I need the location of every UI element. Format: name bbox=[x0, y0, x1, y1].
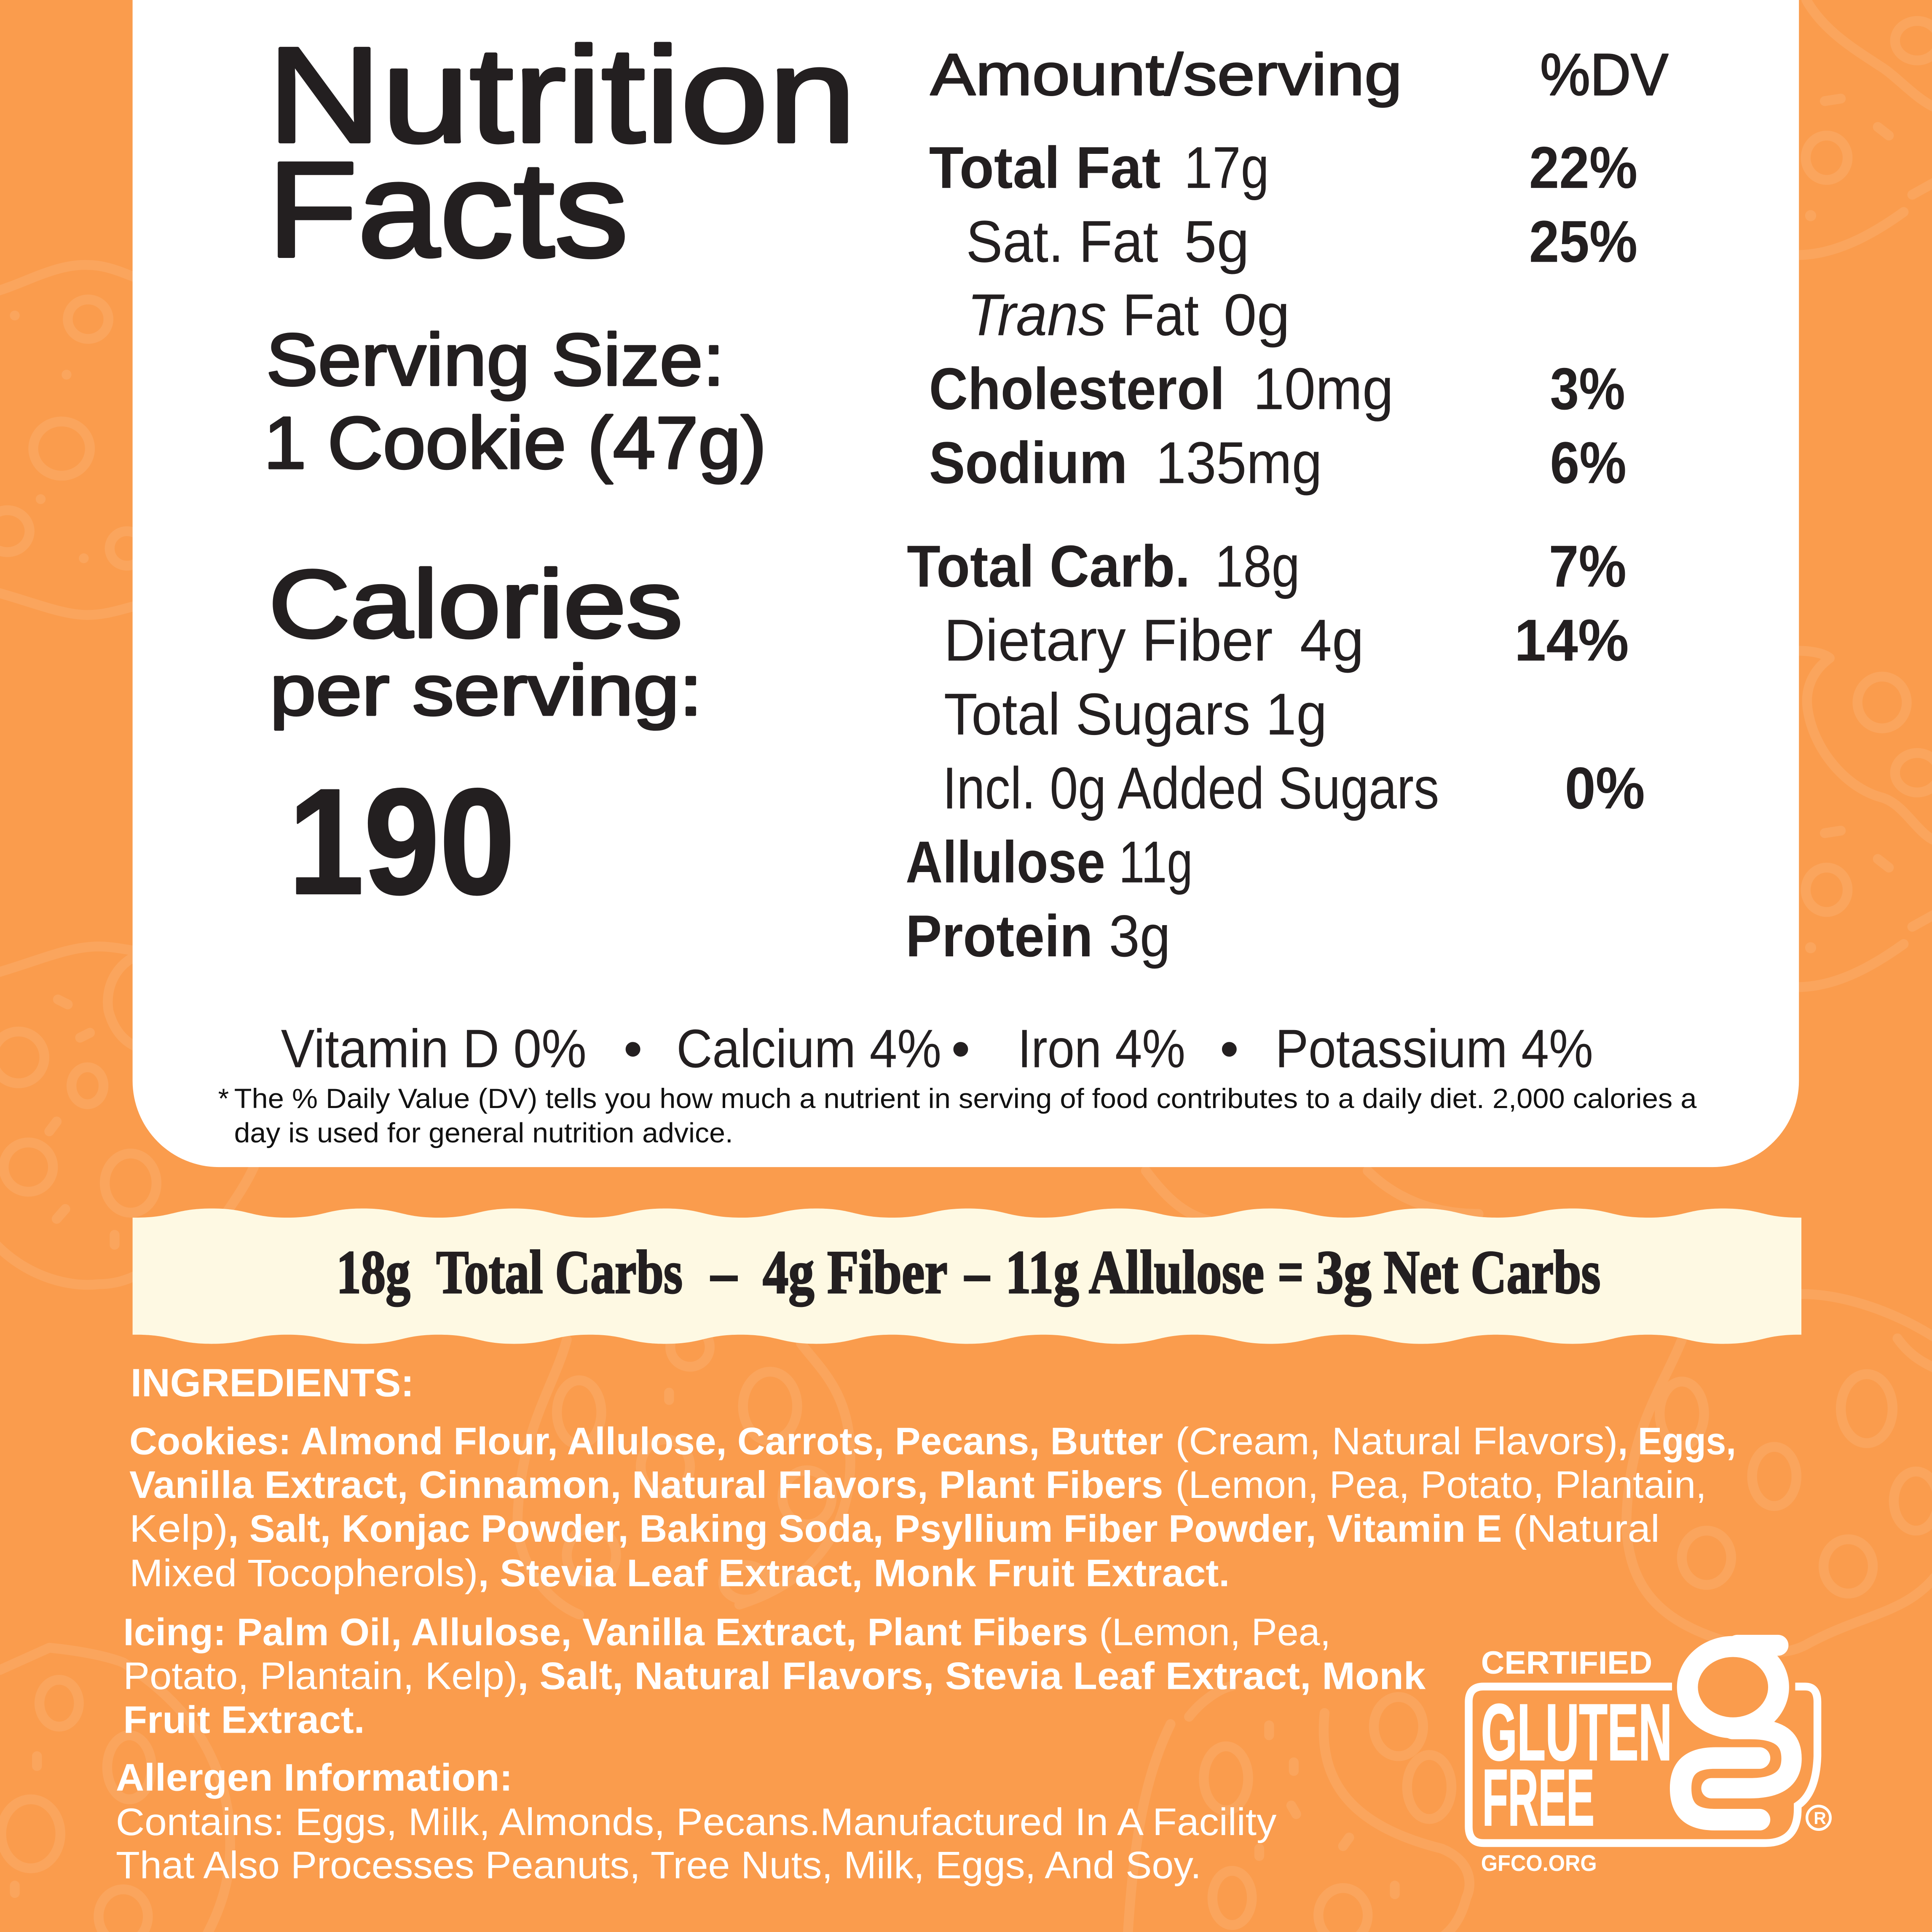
vitamins and minerals row: • bbox=[1220, 1019, 1239, 1079]
cookie ingredients: , Stevia Leaf Extract, Monk Fruit Extract. bbox=[478, 1552, 1230, 1594]
nutrient table: carbs, allulose, protein: 18g bbox=[1215, 533, 1300, 599]
icon: certified gluten free logo: FREE bbox=[1482, 1753, 1594, 1843]
net carbs banner: 18g bbox=[336, 1238, 410, 1306]
column headers: %DV bbox=[1540, 41, 1668, 107]
cookie ingredients: Kelp) bbox=[129, 1508, 228, 1550]
allergen information: That Also Processes Peanuts, Tree Nuts, Milk, Eggs, And Soy. bbox=[116, 1844, 1201, 1886]
calories per serving: Calories bbox=[268, 551, 683, 658]
nutrient table: fats, cholesterol, sodium bbox=[929, 134, 1637, 496]
icing ingredients: Icing: Palm Oil, Allulose, Vanilla Extract, Plant Fibers bbox=[123, 1611, 1088, 1654]
icon: certified gluten free logo: CERTIFIED bbox=[1481, 1645, 1652, 1681]
nutrient table: fats, cholesterol, sodium: 17g bbox=[1184, 134, 1269, 201]
net carbs banner bbox=[133, 1208, 1801, 1344]
title: Nutrition Facts: Nutrition bbox=[268, 19, 856, 171]
nutrient table: fats, cholesterol, sodium: Total Fat bbox=[929, 134, 1161, 201]
nutrient table: carbs, allulose, protein: Total Carb. bbox=[907, 533, 1190, 599]
cookie ingredients: , Eggs, bbox=[1618, 1420, 1736, 1462]
serving size: 1 Cookie (47g) bbox=[264, 402, 766, 484]
nutrient table: fats, cholesterol, sodium: 5g bbox=[1184, 208, 1249, 274]
vitamins and minerals row: Potassium 4% bbox=[1275, 1019, 1593, 1079]
net carbs banner: – bbox=[965, 1238, 990, 1306]
net carbs banner: 3g bbox=[1316, 1238, 1372, 1306]
nutrient table: carbs, allulose, protein: Allulose bbox=[906, 829, 1105, 895]
net carbs banner: Total Carbs bbox=[436, 1238, 683, 1306]
nutrient table: carbs, allulose, protein: Dietary Fiber bbox=[944, 607, 1273, 673]
vitamins and minerals row bbox=[281, 1019, 1593, 1079]
net carbs banner: 4g Fiber bbox=[763, 1238, 948, 1306]
cookie ingredients: , Salt, Konjac Powder, Baking Soda, Psyllium Fiber Powder, Vitamin E bbox=[228, 1508, 1502, 1550]
icon: certified gluten free logo bbox=[1469, 1645, 1830, 1876]
nutrient table: fats, cholesterol, sodium: Trans bbox=[967, 282, 1107, 348]
nutrient table: fats, cholesterol, sodium: Sat. Fat bbox=[966, 208, 1158, 274]
net carbs banner: 11g Allulose bbox=[1005, 1238, 1264, 1306]
icing ingredients: Fruit Extract. bbox=[123, 1699, 365, 1741]
title: Nutrition Facts: Facts bbox=[268, 134, 628, 285]
icing ingredients bbox=[123, 1611, 1426, 1741]
cookie ingredients: Vanilla Extract, Cinnamon, Natural Flavors, Plant Fibers bbox=[129, 1464, 1163, 1506]
allergen information: Contains: Eggs, Milk, Almonds, Pecans.Manufactured In A Facility bbox=[116, 1801, 1277, 1843]
nutrient table: carbs, allulose, protein: 4g bbox=[1300, 607, 1364, 673]
calories per serving: per serving: bbox=[270, 650, 702, 730]
nutrient table: carbs, allulose, protein: Total Sugars 1g bbox=[944, 681, 1327, 747]
icing ingredients: , Salt, Natural Flavors, Stevia Leaf Extract, Monk bbox=[517, 1655, 1426, 1697]
icing ingredients: Potato, Plantain, Kelp) bbox=[123, 1655, 517, 1697]
calories per serving bbox=[268, 551, 702, 730]
net carbs banner: – bbox=[710, 1238, 737, 1306]
nutrient table: fats, cholesterol, sodium: Sodium bbox=[929, 429, 1128, 496]
cookie ingredients: Mixed Tocopherols) bbox=[129, 1552, 478, 1594]
footnote: * bbox=[218, 1083, 229, 1114]
panel: white nutrition card bbox=[133, 0, 1799, 1167]
nutrient table: carbs, allulose, protein: 7% bbox=[1549, 533, 1627, 599]
nutrient table: fats, cholesterol, sodium: Cholesterol bbox=[929, 356, 1225, 422]
cookie ingredients: (Lemon, Pea, Potato, Plantain, bbox=[1176, 1464, 1707, 1506]
calorie count: 190 bbox=[288, 757, 515, 926]
cookie ingredients: (Cream, Natural Flavors) bbox=[1176, 1420, 1618, 1462]
icon: certified gluten free logo: GFCO.ORG bbox=[1481, 1851, 1597, 1876]
column headers: Amount/serving bbox=[930, 41, 1402, 107]
nutrient table: carbs, allulose, protein: Incl. 0g Added Sugars bbox=[943, 755, 1439, 821]
nutrient table: carbs, allulose, protein: 0% bbox=[1565, 755, 1645, 821]
serving size: Serving Size: bbox=[266, 319, 724, 401]
nutrient table: carbs, allulose, protein: 14% bbox=[1514, 607, 1629, 673]
nutrient table: fats, cholesterol, sodium: Fat bbox=[1123, 282, 1199, 348]
footnote: day is used for general nutrition advice. bbox=[234, 1117, 733, 1148]
vitamins and minerals row: Vitamin D 0% bbox=[281, 1019, 587, 1079]
vitamins and minerals row: Iron 4% bbox=[1018, 1019, 1185, 1079]
icing ingredients: (Lemon, Pea, bbox=[1099, 1611, 1331, 1654]
nutrient table: fats, cholesterol, sodium: 6% bbox=[1550, 429, 1627, 496]
icon: certified gluten free logo: R bbox=[1814, 1809, 1826, 1828]
serving size bbox=[264, 319, 766, 484]
nutrient table: fats, cholesterol, sodium: 0g bbox=[1224, 282, 1290, 348]
footnote: The % Daily Value (DV) tells you how much a nutrient in serving of food contributes to a daily diet. 2,000 calories a bbox=[234, 1083, 1697, 1114]
title: Nutrition Facts bbox=[268, 19, 856, 285]
nutrient table: carbs, allulose, protein bbox=[906, 533, 1645, 969]
net carbs banner: = bbox=[1278, 1238, 1304, 1306]
allergen information bbox=[116, 1757, 1277, 1886]
column headers bbox=[930, 41, 1668, 107]
icon: certified gluten free logo: GLUTEN bbox=[1481, 1688, 1672, 1777]
vitamins and minerals row: • bbox=[951, 1019, 970, 1079]
nutrient table: fats, cholesterol, sodium: 3% bbox=[1550, 356, 1625, 422]
ingredients heading: INGREDIENTS: bbox=[131, 1360, 414, 1405]
nutrient table: fats, cholesterol, sodium: 25% bbox=[1529, 208, 1637, 274]
vitamins and minerals row: Calcium 4% bbox=[676, 1019, 941, 1079]
footnote bbox=[218, 1083, 1697, 1148]
allergen information: Allergen Information: bbox=[116, 1757, 512, 1799]
nutrient table: fats, cholesterol, sodium: 10mg bbox=[1253, 356, 1393, 422]
cookie ingredients: (Natural bbox=[1513, 1508, 1660, 1550]
nutrient table: fats, cholesterol, sodium: 22% bbox=[1529, 134, 1637, 201]
cookie ingredients bbox=[129, 1420, 1736, 1594]
nutrient table: carbs, allulose, protein: Protein bbox=[906, 903, 1093, 969]
nutrient table: fats, cholesterol, sodium: 135mg bbox=[1156, 429, 1322, 496]
nutrient table: carbs, allulose, protein: 11g bbox=[1119, 829, 1193, 895]
net carbs banner: Net Carbs bbox=[1384, 1238, 1600, 1306]
nutrient table: carbs, allulose, protein: 3g bbox=[1109, 903, 1171, 969]
cookie ingredients: Cookies: Almond Flour, Allulose, Carrots, Pecans, Butter bbox=[129, 1420, 1163, 1462]
vitamins and minerals row: • bbox=[624, 1019, 643, 1079]
